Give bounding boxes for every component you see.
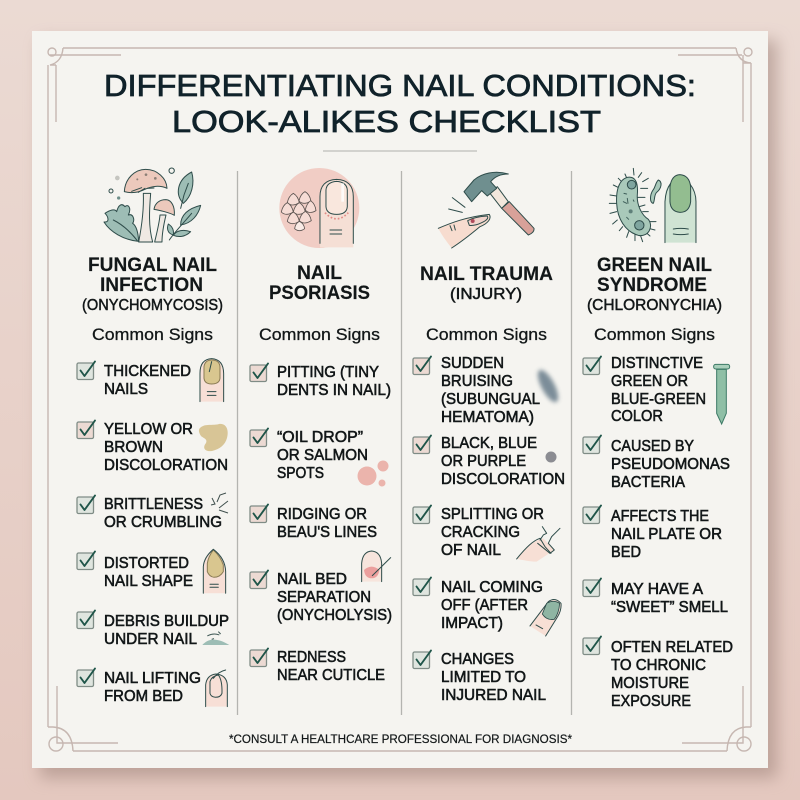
heading: fungal nail infection: INFECTION [100, 275, 203, 296]
check item: changes limited [413, 650, 546, 704]
check item: black blue purple discoloration [413, 435, 565, 488]
check item: changes limited: INJURED NAIL [441, 687, 546, 704]
check item: sudden bruising [413, 355, 540, 426]
check item: sudden bruising: HEMATOMA) [441, 409, 534, 426]
icon: mushrooms and leaves [104, 168, 201, 242]
check item: distinctive green [583, 355, 706, 425]
check item: distinctive green: COLOR [611, 408, 663, 425]
icon: discoloration blob [199, 424, 228, 451]
heading: nail psoriasis: NAIL [297, 263, 342, 284]
check item: oil drop: “OIL DROP” [277, 429, 363, 446]
check item: debris buildup [77, 610, 229, 648]
icon: hammer striking finger [438, 172, 534, 248]
panel: nail psoriasis [250, 168, 392, 684]
check item: distorted nail shape: DISTORTED [104, 555, 189, 572]
icon: green nail spike [714, 364, 730, 424]
check item: distinctive green: BLUE-GREEN [611, 391, 706, 408]
check item: thickened nails [77, 362, 191, 398]
check item: ridging: RIDGING OR [277, 506, 367, 523]
check item: splitting: SPLITTING OR [441, 506, 544, 523]
subheading: Common Signs [92, 325, 213, 344]
check item: debris buildup: DEBRIS BUILDUP [104, 613, 229, 630]
subheading: Common Signs [426, 325, 547, 344]
check item: chronic moisture [583, 636, 733, 710]
check item: black blue purple discoloration: DISCOLORATION [441, 471, 565, 488]
check item: sweet smell: “SWEET” SMELL [611, 599, 728, 616]
check item: redness: NEAR CUTICLE [277, 667, 385, 684]
heading: green nail syndrome: (CHLORONYCHIA) [587, 297, 722, 314]
icon: bruise [534, 367, 562, 405]
check item: pitting [250, 364, 391, 399]
check item: caused by pseudomonas: PSEUDOMONAS [611, 456, 730, 473]
check item: caused by pseudomonas: CAUSED BY [611, 438, 694, 455]
check item: black blue purple discoloration: BLACK, BLUE [441, 435, 537, 452]
icon: lifting nail [206, 670, 227, 707]
heading: nail trauma: (INJURY) [450, 286, 522, 303]
check item: yellow or brown discoloration: BROWN [104, 439, 163, 456]
icon: nail coming off [530, 599, 561, 636]
check item: distorted nail shape: NAIL SHAPE [104, 573, 193, 590]
check item: changes limited: CHANGES [441, 651, 514, 668]
check item: redness [250, 648, 385, 684]
check item: brittleness: BRITTLENESS [104, 496, 203, 513]
icon: thickened nail [200, 359, 224, 402]
check item: chronic moisture: TO CHRONIC [611, 657, 706, 674]
heading: nail trauma: NAIL TRAUMA [420, 264, 553, 285]
check item: nail lifting [77, 668, 201, 705]
heading: fungal nail infection [82, 255, 223, 314]
check item: splitting: CRACKING [441, 524, 520, 541]
check item: nail bed separation: SEPARATION [277, 589, 371, 606]
check item: debris buildup: UNDER NAIL [104, 631, 197, 648]
heading: nail psoriasis: PSORIASIS [269, 283, 370, 304]
check item: nail bed separation: (ONYCHOLYSIS) [277, 607, 392, 624]
check item: ridging [250, 504, 377, 541]
check item: nail coming off: OFF (AFTER [441, 597, 528, 614]
check item: affects nail plate: AFFECTS THE [611, 508, 709, 525]
check item: distorted nail shape [77, 552, 193, 590]
check item: nail bed separation: NAIL BED [277, 571, 347, 588]
check item: caused by pseudomonas: BACTERIA [611, 474, 685, 491]
subheading: Common Signs [594, 325, 715, 344]
check item: yellow or brown discoloration [77, 420, 228, 474]
check item: sudden bruising: BRUISING [441, 373, 513, 390]
check item: black blue purple discoloration: OR PURPLE [441, 453, 526, 470]
title: DIFFERENTIATING NAIL CONDITIONS: [104, 68, 696, 103]
check item: distinctive green: GREEN OR [611, 373, 688, 390]
icon: cracked nail [517, 527, 560, 562]
ornamental frame [48, 48, 752, 751]
check item: nail lifting: FROM BED [104, 688, 183, 705]
check item: sudden bruising: SUDDEN [441, 355, 504, 372]
panel: nail trauma [413, 172, 565, 704]
check item: distinctive green: DISTINCTIVE [611, 355, 703, 372]
check item: nail coming off: NAIL COMING [441, 579, 543, 596]
check item: caused by pseudomonas [583, 436, 730, 491]
icon: discoloration dot [546, 452, 556, 462]
footer disclaimer: *CONSULT A HEALTHCARE PROFESSIONAL FOR DIAGNOSIS* [229, 734, 573, 746]
check item: affects nail plate [583, 506, 722, 561]
icon: salmon spots [358, 460, 388, 486]
check item: chronic moisture: EXPOSURE [611, 693, 691, 710]
check item: affects nail plate: BED [611, 544, 641, 561]
check item: oil drop: SPOTS [277, 465, 324, 482]
panel: fungal nail infection [77, 168, 229, 707]
title [104, 68, 696, 139]
check item: sudden bruising: (SUBUNGUAL [441, 391, 540, 408]
title: LOOK-ALIKES CHECKLIST [172, 104, 601, 139]
heading: green nail syndrome [587, 255, 722, 314]
check item: brittleness: OR CRUMBLING [104, 514, 222, 531]
check item: oil drop: OR SALMON [277, 447, 368, 464]
check item: chronic moisture: OFTEN RELATED [611, 639, 733, 656]
check item: thickened nails: THICKENED [104, 363, 191, 380]
icon: distorted nail [203, 549, 226, 593]
check item: oil drop [250, 428, 368, 482]
subheading: Common Signs [259, 325, 380, 344]
check item: sweet smell [583, 578, 728, 616]
heading: green nail syndrome: SYNDROME [597, 275, 707, 296]
panel: green nail syndrome [583, 168, 733, 710]
icon: bacterium and green nail [609, 168, 696, 243]
check item: splitting [413, 506, 544, 559]
check item: chronic moisture: MOISTURE [611, 675, 689, 692]
check item: thickened nails: NAILS [104, 381, 148, 398]
check item: nail lifting: NAIL LIFTING [104, 670, 201, 687]
icon: debris pile [202, 632, 229, 645]
icon: nail separation [362, 551, 391, 582]
check item: affects nail plate: NAIL PLATE OR [611, 526, 722, 543]
check item: ridging: BEAU'S LINES [277, 524, 377, 541]
check item: sweet smell: MAY HAVE A [611, 581, 703, 598]
check item: pitting: DENTS IN NAIL) [277, 382, 391, 399]
heading: green nail syndrome: GREEN NAIL [597, 255, 712, 276]
heading: fungal nail infection: FUNGAL NAIL [88, 255, 217, 276]
check item: brittleness [77, 496, 222, 531]
heading: nail psoriasis [269, 263, 370, 304]
check item: nail coming off [413, 578, 543, 632]
icon: crumbling marks [211, 493, 228, 513]
check item: nail bed separation [250, 570, 392, 624]
check item: pitting: PITTING (TINY [277, 364, 379, 381]
heading: nail trauma [420, 264, 553, 303]
check item: nail coming off: IMPACT) [441, 615, 503, 632]
check item: yellow or brown discoloration: YELLOW OR [104, 421, 193, 438]
check item: changes limited: LIMITED TO [441, 669, 526, 686]
check item: yellow or brown discoloration: DISCOLORATION [104, 457, 228, 474]
icon: psoriasis nail with scales [279, 168, 359, 248]
check item: splitting: OF NAIL [441, 542, 501, 559]
heading: fungal nail infection: (ONYCHOMYCOSIS) [82, 297, 223, 314]
check item: redness: REDNESS [277, 649, 346, 666]
